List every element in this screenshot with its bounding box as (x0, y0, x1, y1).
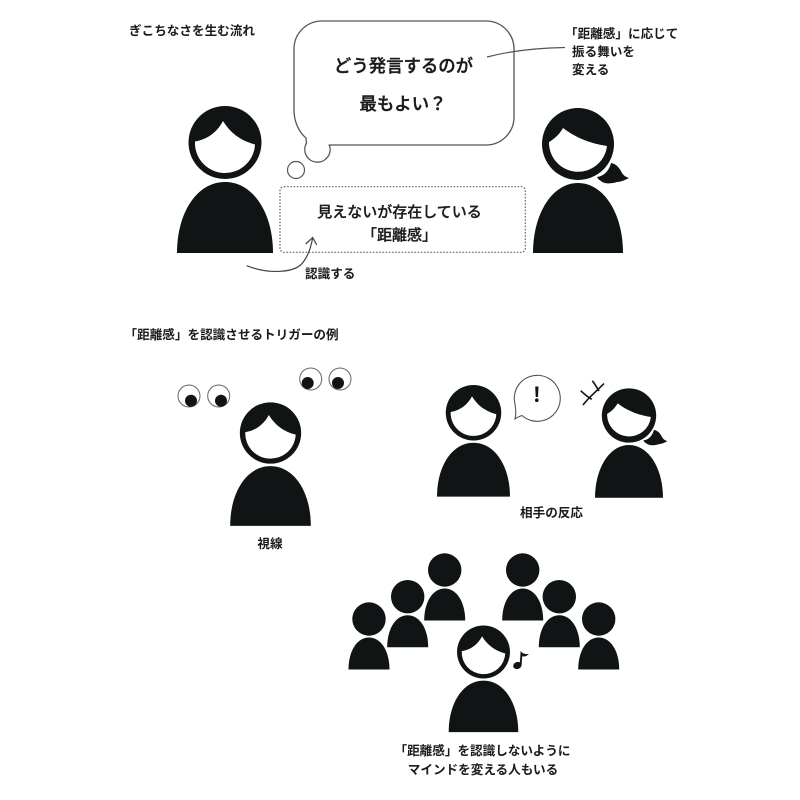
note: change behaviour according to distance: 振る舞いを (572, 44, 635, 59)
leader line to note (487, 48, 565, 57)
caption: some change their mindset: マインドを変える人もいる (408, 762, 558, 777)
person: watched man (230, 402, 311, 526)
icon: tension spark (581, 381, 604, 405)
arrow: recognise (247, 238, 317, 271)
speech bubble with exclamation (514, 375, 560, 421)
person: right woman (533, 108, 629, 253)
heading: flow that creates awkwardness: ぎこちなさを生む流れ (129, 23, 255, 38)
crowd: left group (348, 553, 465, 670)
dotted box text: 「距離感」 (362, 226, 437, 244)
note: change behaviour according to distance: 「距離感」に応じて (565, 26, 678, 41)
person: reaction man (437, 385, 510, 497)
note: change behaviour according to distance: 変える (572, 62, 609, 77)
person: left man (177, 106, 273, 253)
note: change behaviour according to distance (565, 26, 678, 77)
dotted box text: 見えないが存在している (317, 203, 482, 221)
label: other person's reaction: 相手の反応 (520, 505, 583, 520)
person: carefree man (449, 626, 518, 732)
person: reaction woman (595, 388, 668, 498)
bubble text: どう発言するのが (334, 56, 473, 76)
label: gaze: 視線 (257, 536, 283, 551)
caption: some change their mindset (394, 743, 571, 777)
heading: trigger examples: 「距離感」を認識させるトリガーの例 (124, 327, 339, 342)
icon: music note (512, 651, 529, 670)
bubble text (334, 56, 473, 114)
dotted box text (317, 203, 482, 244)
thought bubble (288, 21, 514, 178)
crowd: right group (502, 553, 619, 670)
caption: some change their mindset: 「距離感」を認識しないように (394, 743, 571, 758)
bubble text: 最もよい？ (360, 94, 446, 114)
dotted box: invisible distance (280, 187, 525, 252)
label: recognise: 認識する (305, 266, 355, 281)
icon: watching eyes (178, 368, 351, 407)
